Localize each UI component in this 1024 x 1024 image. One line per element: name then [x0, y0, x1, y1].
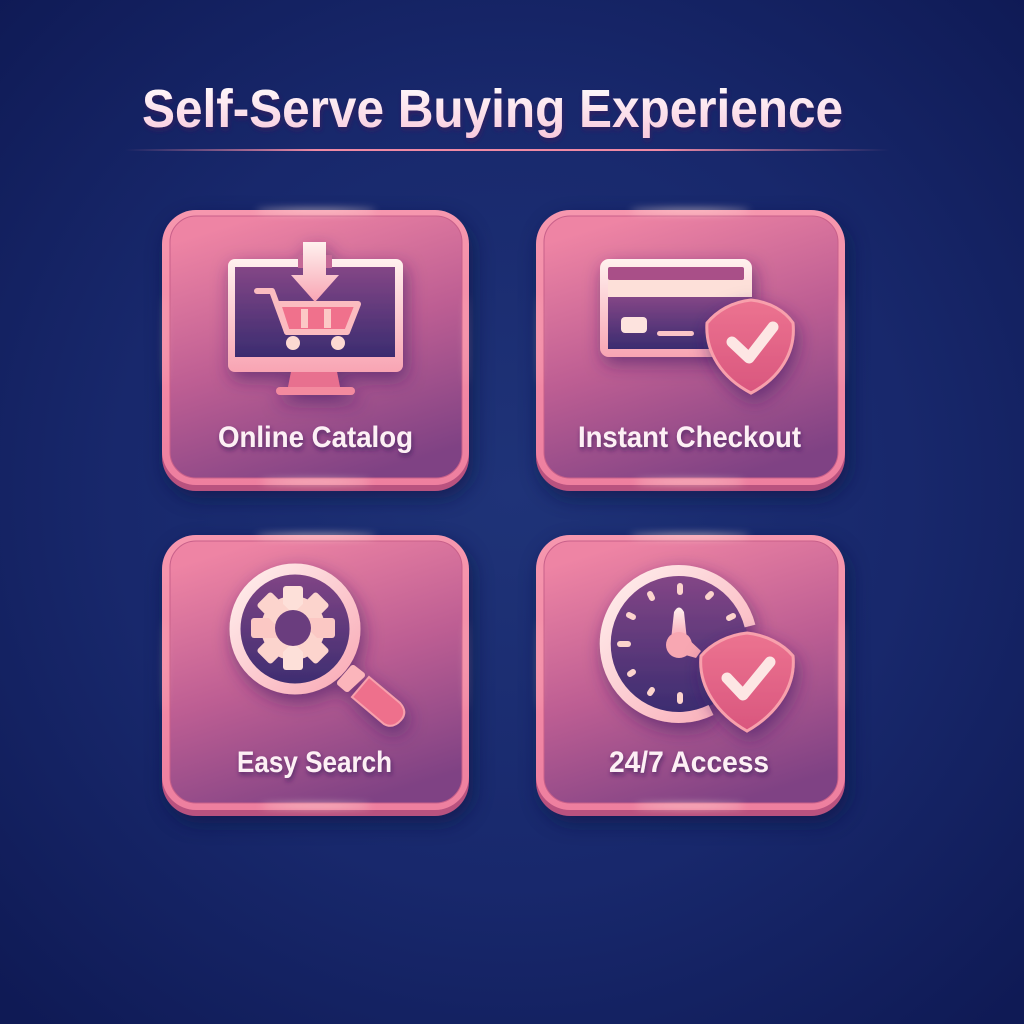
icon: magnifying glass with gear [235, 569, 404, 726]
label: 24/7 access: 24/7 Access [609, 746, 769, 779]
icon: shield with check [707, 300, 793, 393]
panel: 24/7 access [536, 534, 849, 823]
title: Self-Serve Buying Experience [142, 79, 843, 139]
panel: instant checkout [536, 209, 849, 498]
icon: monitor with shopping cart [228, 242, 403, 395]
label: online catalog: Online Catalog [218, 421, 413, 454]
icon: shield with check [701, 633, 793, 731]
panel: easy search [162, 534, 473, 823]
panel: online catalog [162, 209, 473, 498]
icon: credit card [600, 259, 752, 357]
label: easy search: Easy Search [237, 746, 392, 779]
icon: clock [605, 570, 750, 717]
label: instant checkout: Instant Checkout [578, 421, 801, 454]
